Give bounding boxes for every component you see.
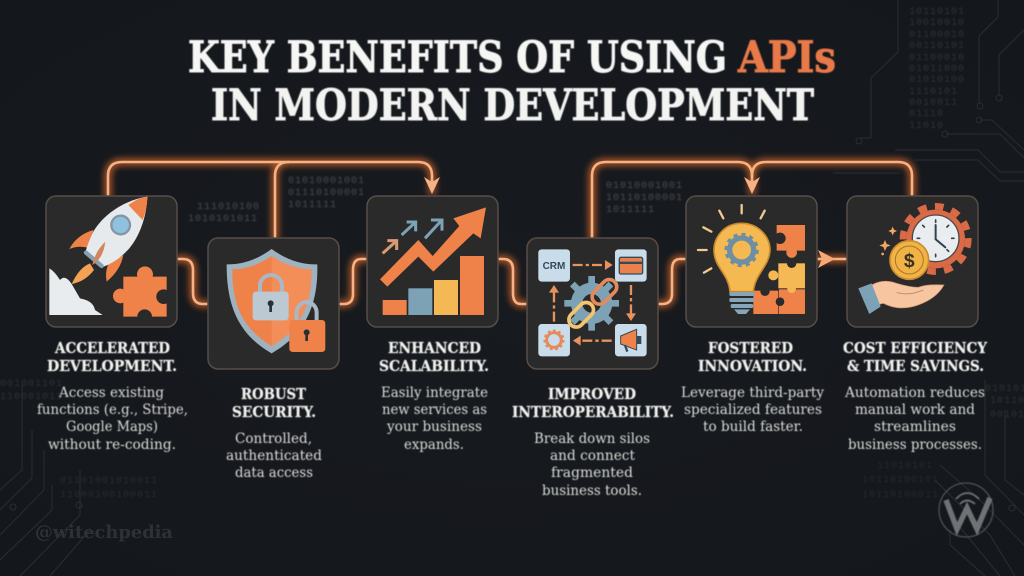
description: without re-coding. — [48, 437, 176, 453]
text: 11000100100011 — [60, 490, 158, 501]
title: KEY BENEFITS OF USING — [188, 33, 727, 83]
icon: growth chart — [380, 207, 486, 315]
text: 01101001010011 — [60, 476, 158, 487]
description: expands. — [404, 437, 464, 453]
text: 1110101 — [909, 87, 958, 98]
heading — [232, 386, 316, 421]
arrow: into scalability — [424, 177, 440, 194]
description: business tools. — [542, 483, 642, 499]
icon: light bulb and puzzle — [698, 205, 805, 314]
text: 11010 — [909, 121, 944, 132]
icon: clock, coin and hand: $ — [904, 251, 915, 272]
icon: clock, coin and hand — [858, 206, 968, 314]
text: 01010100 — [909, 75, 965, 86]
text: 10110100011 — [862, 490, 939, 501]
text: 001001101 — [0, 379, 63, 390]
panel: accelerated development — [37, 196, 188, 453]
description — [681, 385, 824, 435]
icon: connected tools with chain and gear: CRM — [543, 261, 565, 272]
description: Automation reduces — [844, 385, 985, 401]
description: specialized features — [684, 402, 822, 418]
description: manual work and — [855, 402, 975, 418]
description — [381, 385, 488, 453]
text: 1011111 — [606, 205, 655, 216]
description: authenticated — [226, 448, 322, 464]
description: Easily integrate — [381, 385, 488, 401]
heading: ACCELERATED — [54, 340, 170, 357]
description: your business — [386, 419, 482, 435]
heading — [379, 340, 489, 375]
panel: fostered innovation — [681, 196, 824, 435]
icon: connected tools with chain and gear — [538, 249, 647, 356]
text: 111010100 — [197, 202, 260, 213]
description — [37, 385, 188, 453]
description: Access existing — [58, 385, 164, 401]
description: fragmented — [551, 465, 633, 481]
title: IN MODERN DEVELOPMENT — [211, 81, 814, 131]
text: 0010011 — [909, 98, 958, 109]
heading — [698, 340, 807, 375]
text: 01110100001 — [288, 188, 365, 199]
description: Google Maps) — [66, 419, 158, 435]
icon: shield with padlocks — [227, 249, 325, 353]
glowing connector network — [108, 162, 912, 304]
heading: ENHANCED — [388, 340, 481, 357]
description — [226, 431, 322, 481]
text: 01100010 — [909, 53, 965, 64]
description: Break down silos — [534, 431, 650, 447]
description: streamlines — [874, 419, 956, 435]
title — [188, 33, 836, 131]
text: 10110100001 — [606, 193, 683, 204]
arrow: innovation to cost efficiency — [818, 250, 835, 268]
text: 10110101 — [909, 7, 965, 18]
text: 01010001001 — [606, 181, 683, 192]
text: 10110100101 — [862, 475, 939, 486]
panel: enhanced scalability — [367, 196, 498, 453]
text: 1011111 — [288, 200, 337, 211]
description: functions (e.g., Stripe, — [37, 402, 188, 418]
heading: IMPROVED — [548, 386, 636, 403]
arrow: into innovation — [744, 177, 760, 194]
description — [534, 431, 650, 499]
description: Controlled, — [235, 431, 312, 447]
text: 110001011 — [0, 392, 63, 403]
icon: rocket and puzzle piece — [49, 197, 167, 317]
text: 01100010 — [909, 30, 965, 41]
description: new services as — [382, 402, 487, 418]
heading: SECURITY. — [232, 404, 316, 421]
panel: robust security — [208, 238, 339, 481]
description: data access — [235, 465, 313, 481]
heading — [843, 340, 988, 375]
heading: COST EFFICIENCY — [843, 340, 988, 357]
text: 00110101 — [909, 41, 965, 52]
text: 11010101 — [877, 461, 933, 472]
heading: SCALABILITY. — [379, 358, 489, 375]
text: 10010010 — [909, 18, 965, 29]
heading: INTEROPERABILITY. — [512, 404, 674, 421]
description — [844, 385, 985, 453]
description: business processes. — [848, 437, 982, 453]
description: to build faster. — [703, 419, 803, 435]
heading: FOSTERED — [708, 340, 793, 357]
watermark handle: @witechpedia — [35, 522, 173, 543]
heading — [512, 386, 674, 421]
heading — [47, 340, 177, 375]
heading: DEVELOPMENT. — [47, 358, 177, 375]
panel: improved interoperability — [512, 238, 674, 499]
text: 00101 — [990, 410, 1024, 421]
text: 1010101011 — [188, 214, 258, 225]
text: 01110 — [909, 109, 944, 120]
text: 01010001001 — [288, 176, 365, 187]
title: APIs — [737, 33, 836, 83]
text: 10110 — [990, 396, 1024, 407]
panel: cost efficiency and time savings — [843, 196, 988, 453]
description: and connect — [550, 448, 636, 464]
watermark logo — [939, 483, 993, 537]
heading: ROBUST — [241, 386, 306, 403]
description: Leverage third-party — [681, 385, 824, 401]
heading: INNOVATION. — [698, 358, 807, 375]
heading: & TIME SAVINGS. — [847, 358, 984, 375]
text: 01011000 — [909, 64, 965, 75]
